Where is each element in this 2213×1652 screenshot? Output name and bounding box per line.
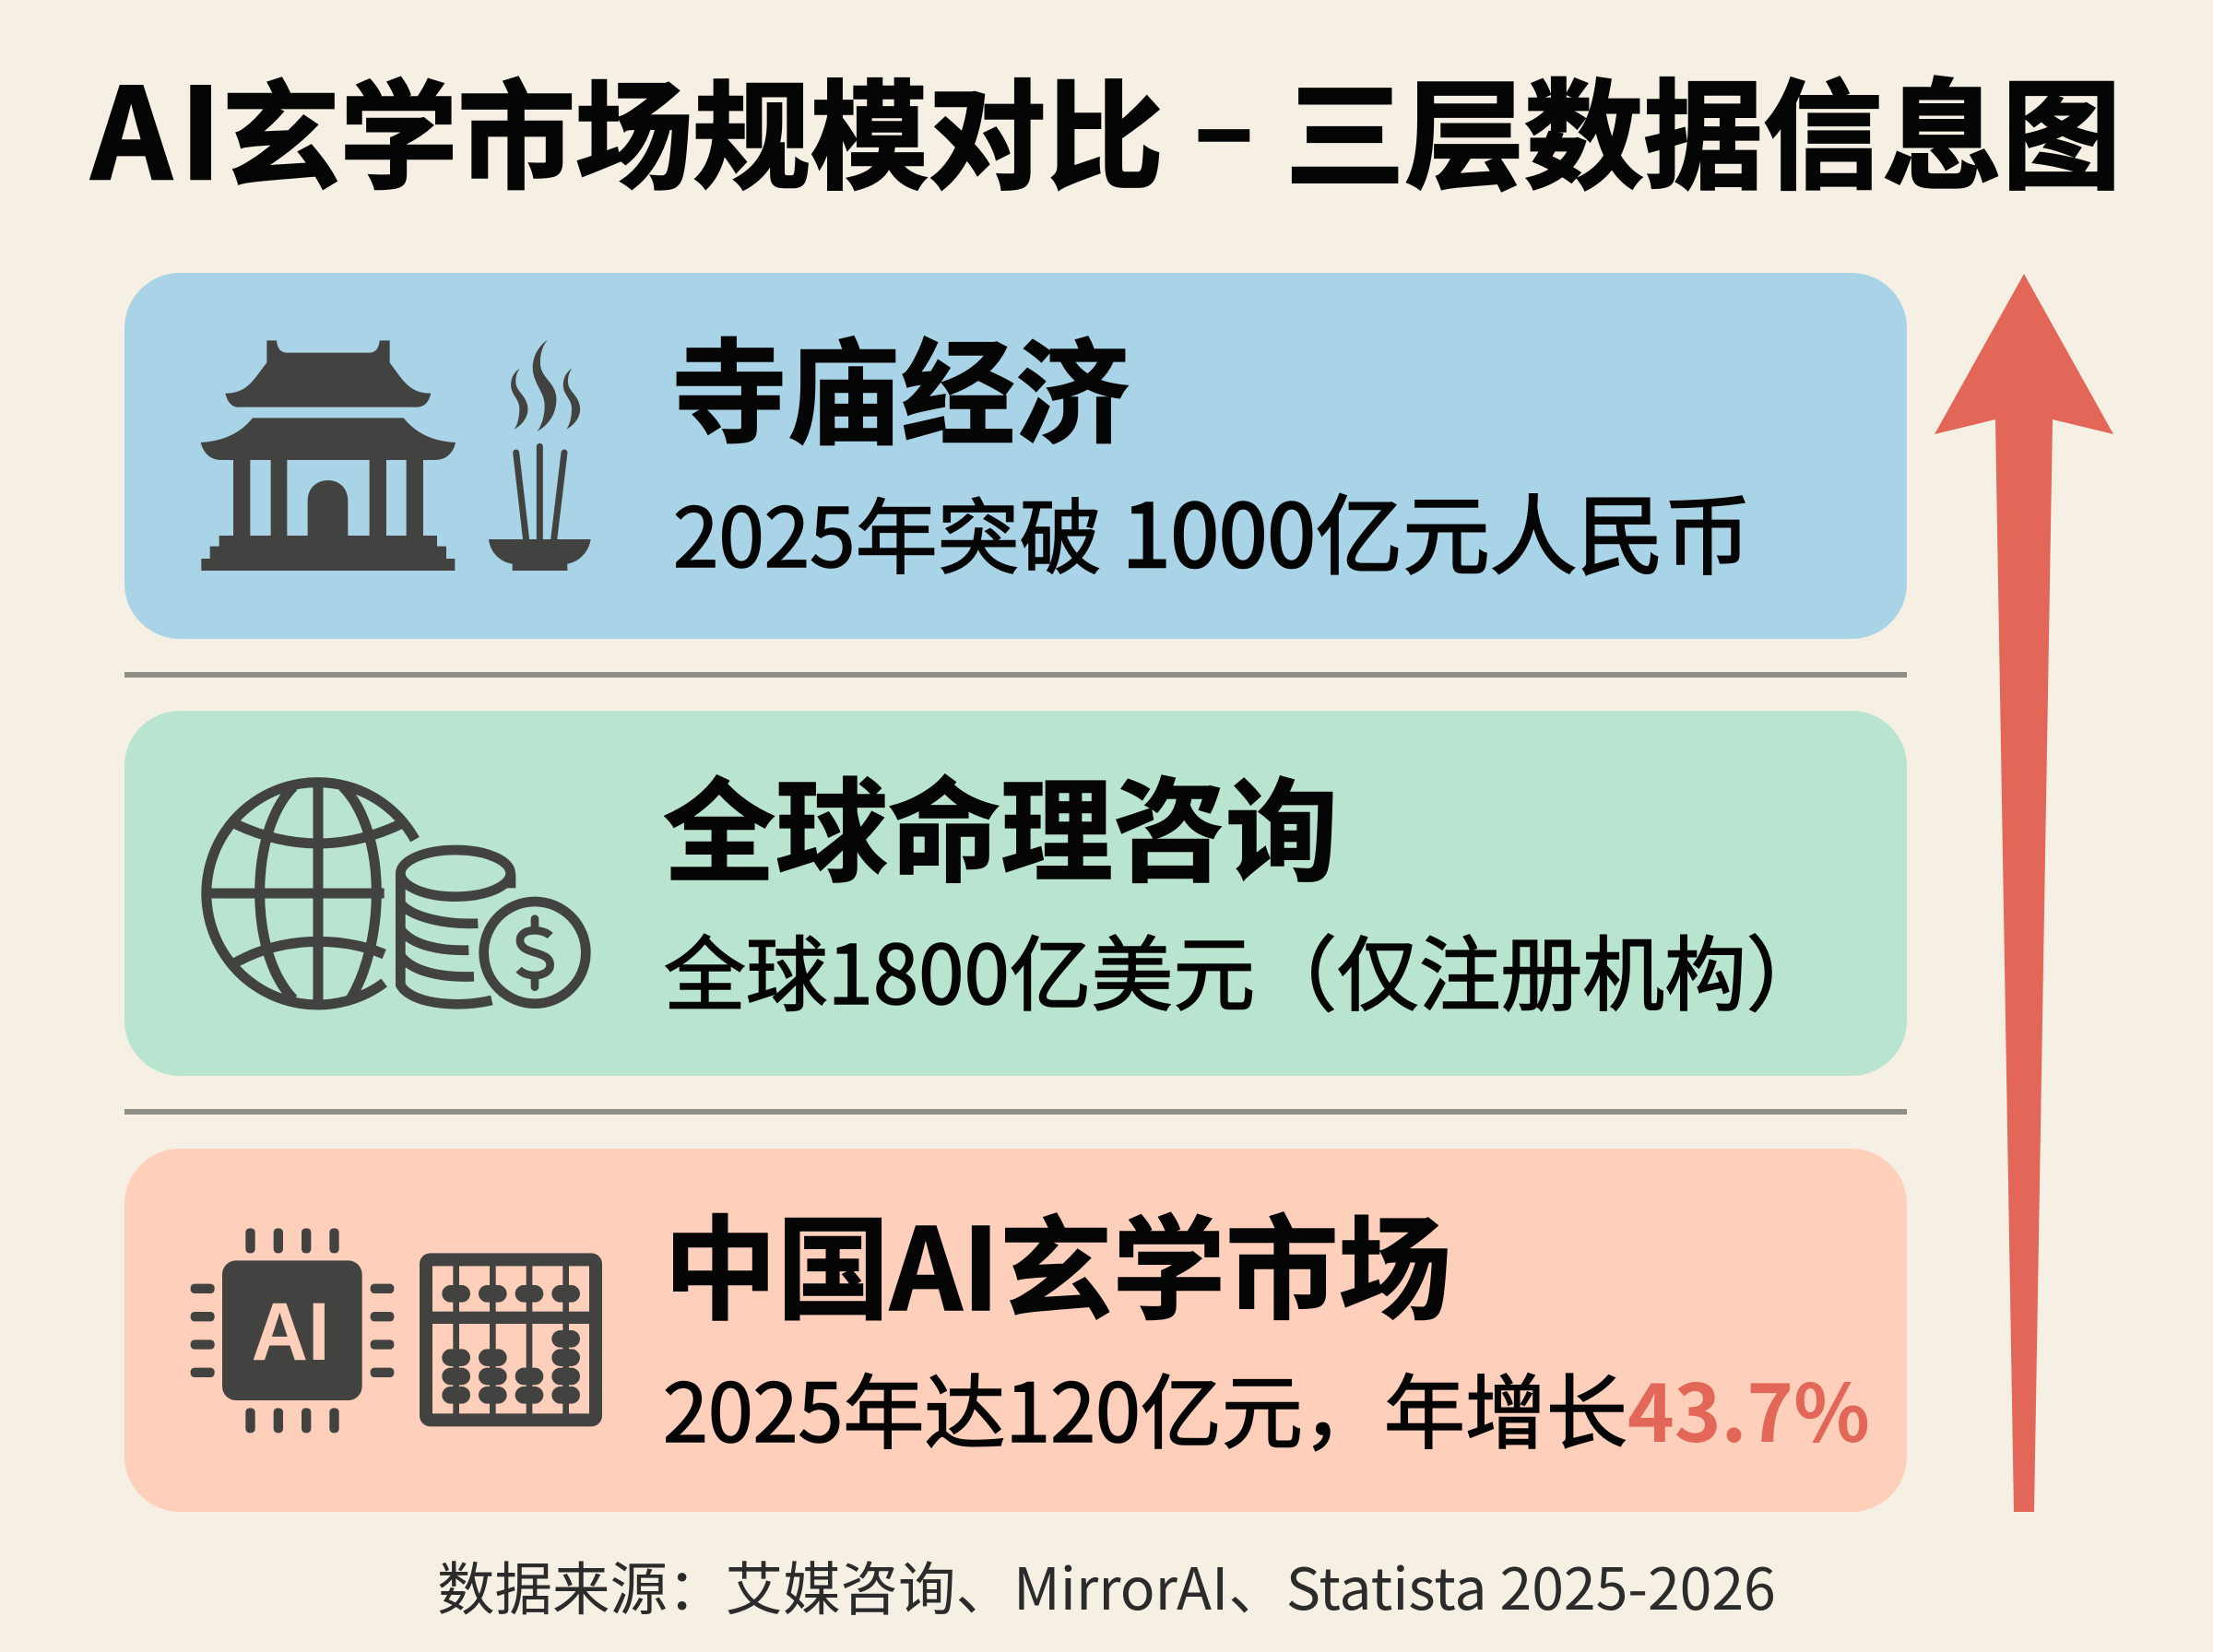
panel text: China market figure: 2025年达120亿元，年增长 [663, 1349, 1627, 1466]
title: AI [90, 34, 230, 216]
source note: 数据来源：艾媒咨询、MirrorAI、Statista 2025-2026 [437, 1542, 1776, 1626]
icon: AI chip [191, 1228, 394, 1433]
icon: globe [207, 782, 415, 1005]
title: 三层数据信息图 [1285, 41, 2121, 214]
icon: temple [201, 340, 456, 571]
panel heading: global fortune consulting: 全球命理咨询 [663, 742, 1338, 905]
divider [124, 672, 1907, 678]
panel heading: temple economy: 寺庙经济 [672, 301, 1130, 467]
icon: abacus [426, 1259, 596, 1420]
panel text: global figure: 全球1800亿美元（仅注册机构） [664, 909, 1828, 1028]
icon: coins with dollar [400, 850, 586, 1004]
panel heading: China AI metaphysics market: 中国AI玄学市场 [664, 1180, 1451, 1343]
icon: incense burner [489, 339, 591, 571]
panel text: temple economy figure: 亿元人民币 [1316, 466, 1751, 593]
title: 玄学市场规模对比 [222, 42, 1164, 213]
panel: temple economy [124, 273, 1907, 639]
icon: AI chip: AI [252, 1285, 330, 1377]
panel: China AI metaphysics market [124, 1149, 1907, 1512]
panel text: China market figure: 43.7% [1627, 1350, 1870, 1465]
panel text: temple economy figure: 2025年突破 [673, 472, 1102, 591]
panel text: temple economy figure: 1000 [1122, 466, 1316, 593]
panel: global fortune consulting [124, 711, 1907, 1076]
divider [124, 1109, 1907, 1115]
arrow: upward growth [1935, 274, 2113, 1512]
title: – [1194, 41, 1254, 199]
